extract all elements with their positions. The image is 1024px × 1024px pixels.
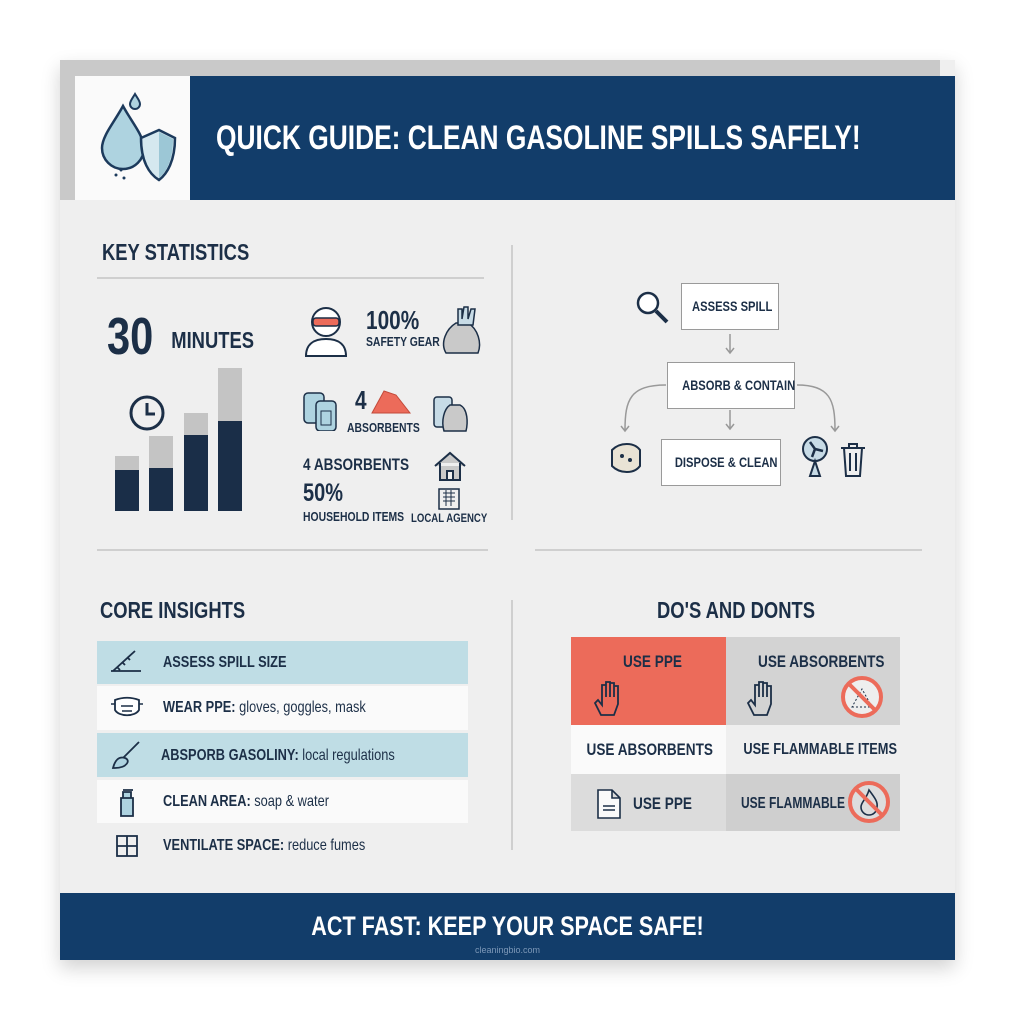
dividers [511,245,513,520]
icon: trash can [841,443,865,477]
cell: use absorbents (gray): USE ABSORBENTS [758,652,884,671]
header icon box [75,76,190,200]
row: ventilate space: VENTILATE SPACE: reduce fumes [163,837,365,854]
icon: absorbent pile [371,390,411,414]
stat: 4 absorbents: 4 [355,385,367,415]
box: assess spill: ASSESS SPILL [692,298,772,314]
footer text: ACT FAST: KEEP YOUR SPACE SAFE! [311,911,704,941]
stat: household items: 4 ABSORBENTS [303,455,409,474]
icon: sponge [611,443,641,473]
icon: clock [130,396,164,430]
box: absorb & contain [667,362,795,409]
cell: use ppe (red): USE PPE [623,652,682,671]
heading: KEY STATISTICS [102,239,249,265]
row: ventilate space [116,835,365,857]
panel: core insights [97,597,468,857]
cell: use ppe (red) [571,637,726,725]
icon: fan [802,436,828,477]
panel: key statistics: HOUSEHOLD ITEMS [303,509,404,524]
row: wear ppe [97,686,468,730]
icon: building [438,488,460,510]
row: wear ppe: WEAR PPE: gloves, goggles, mask [163,699,366,716]
row: clean area: CLEAN AREA: soap & water [163,793,329,810]
box: absorb & contain: ABSORB & CONTAIN [682,377,795,393]
panel: key statistics: 50% [303,479,343,507]
row: assess spill size: ASSESS SPILL SIZE [163,654,287,671]
cell: use flammable items [726,725,900,774]
cell: use ppe (document): USE PPE [633,794,692,813]
watermark: cleaningbio.com [475,945,540,955]
cell: use ppe (document) [571,774,726,831]
row: clean area [97,780,468,823]
icon: bag with glove [442,306,480,354]
stat: 30 minutes: 30 MINUTES [107,308,254,366]
icon: drop and shield [100,92,176,182]
panel: process flowchart [611,283,865,486]
card background [60,60,955,960]
cell: use absorbents (gray) [726,637,900,725]
panel: key statistics: SAFETY GEAR [366,334,440,349]
panel: dos and donts [571,597,900,831]
arrows [620,334,840,432]
box: dispose & clean [661,439,781,486]
icon: bottles [303,392,337,431]
icon: waste bags [433,396,468,432]
stat: 100% safety gear: 100% [366,305,419,335]
heading: CORE INSIGHTS [100,597,245,623]
icon: magnifier [636,292,668,324]
row: absorb gasoline: ABSPORB GASOLINY: local regulations [161,747,395,764]
cell: use absorbents (white) [571,725,726,774]
box: assess spill [681,283,779,330]
cell: use flammable [726,774,900,831]
icon: person with goggles [305,307,347,357]
panel: key statistics [97,239,488,525]
header banner [190,76,955,200]
box: dispose & clean: DISPOSE & CLEAN [675,454,778,470]
cell: use absorbents (white): USE ABSORBENTS [586,740,713,759]
panel: key statistics: ABSORBENTS [347,420,420,435]
cell: use flammable items: USE FLAMMABLE ITEMS [743,741,897,758]
heading: DO'S AND DONTS [657,597,815,623]
footer banner [60,893,955,960]
row: assess spill size [97,641,468,684]
bar chart [115,368,242,511]
row: absorb gasoline [97,733,468,777]
title: QUICK GUIDE: CLEAN GASOLINE SPILLS SAFELY! [216,119,861,157]
cell: use flammable: USE FLAMMABLE [741,795,845,812]
icon: house [434,452,466,481]
panel: key statistics: LOCAL AGENCY [411,511,487,525]
